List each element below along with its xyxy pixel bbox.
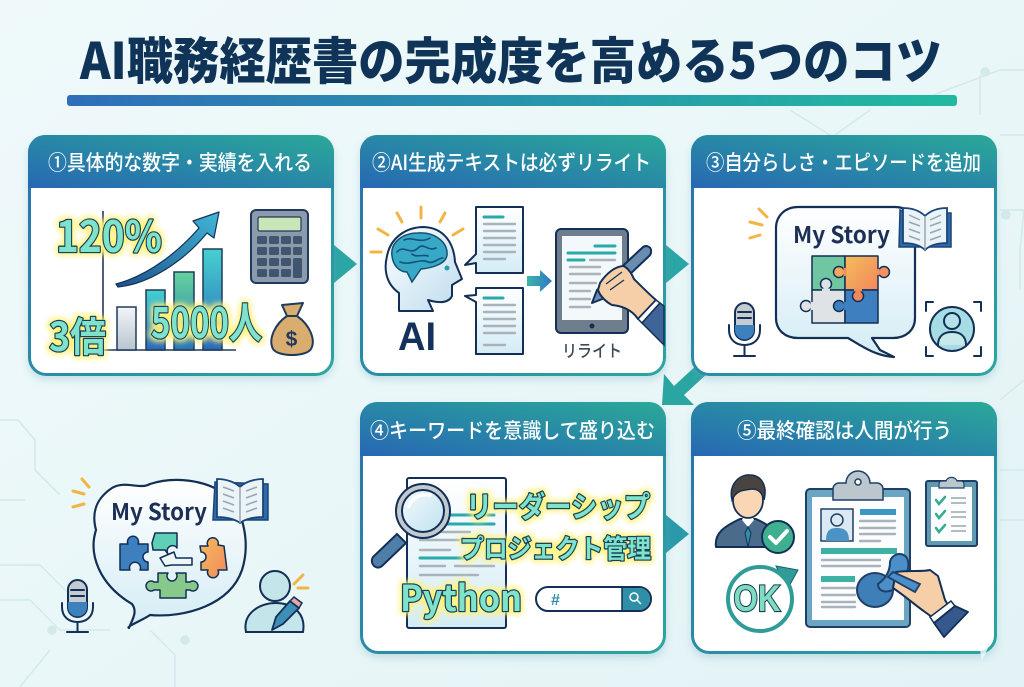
label リライト: リライト (562, 337, 622, 362)
card body 1 (30, 136, 332, 374)
icon: book free (213, 479, 268, 523)
stat 120%: 120% (56, 203, 162, 265)
icon: OK bubble: OK (734, 578, 781, 619)
panel: free illustration my story (62, 479, 308, 632)
card body 3 (692, 136, 996, 374)
generated text bubble bottom (465, 288, 523, 354)
icon: magnifying glass (372, 484, 450, 568)
story label: My Story (793, 216, 890, 250)
title: AI職務経歴書の完成度を高める5つのコツ (79, 22, 942, 94)
bar chart with arrow (103, 211, 236, 350)
label AI: AI (398, 315, 436, 359)
panel: step 3 my story (691, 135, 997, 374)
stat 5000人: 5000人 (151, 290, 262, 351)
header 3 (691, 135, 997, 188)
panel: step 2 rewrite (360, 135, 666, 374)
card body 4 (362, 404, 664, 652)
icon: speech bubble (776, 207, 915, 357)
icon: puzzle (800, 256, 890, 323)
panel: step 5 human check (691, 402, 997, 652)
title underline bar (67, 95, 957, 106)
icon: small checklist (926, 477, 977, 546)
header 4 (360, 402, 666, 456)
icon: microphone free (62, 580, 93, 632)
icon: money bag (271, 303, 313, 355)
arrow: step 2 to 3 (666, 245, 689, 283)
icon: stamp and hand (857, 554, 968, 637)
heading 4: ④キーワードを意識して盛り込む (370, 415, 655, 445)
search box: # (551, 592, 560, 609)
panel: step 1 numbers (28, 135, 334, 374)
icon: business person (716, 475, 780, 547)
icon: sparks (750, 209, 767, 238)
large speech bubble (94, 480, 246, 628)
search box (536, 587, 651, 611)
icon: clipboard resume (806, 471, 910, 627)
generated text bubble top (465, 207, 523, 273)
card body 5 (692, 404, 996, 652)
keyword Python: Python (400, 570, 522, 622)
icon: person with pencil (245, 571, 308, 632)
icon: AI head with brain (386, 227, 462, 311)
icon: OK bubble (728, 566, 798, 631)
icon: hand writing with pen (592, 246, 664, 345)
card body 2 (362, 136, 664, 374)
icon: microphone (729, 303, 760, 356)
sparkle (978, 640, 992, 660)
arrow: step 1 to 2 (334, 245, 357, 283)
keyword プロジェクト管理: プロジェクト管理 (460, 529, 651, 566)
header 1 (28, 135, 334, 188)
icon: idea rays (371, 207, 463, 252)
heading 5: ⑤最終確認は人間が行う (737, 415, 952, 445)
header 5 (691, 402, 997, 456)
keyword リーダーシップ: リーダーシップ (466, 484, 650, 526)
icon: scattered puzzle pieces (120, 533, 227, 598)
icon: money bag: $ (286, 328, 298, 351)
icon: profile frame (926, 302, 981, 356)
heading 1: ①具体的な数字・実績を入れる (48, 147, 312, 177)
icon: resume document (407, 478, 506, 628)
arrow: step 4 to 5 (666, 515, 689, 553)
heading 2: ②AI生成テキストは必ずリライト (372, 147, 651, 177)
icon: calculator (251, 210, 308, 283)
header 2 (360, 135, 666, 188)
icon: check badge (762, 521, 794, 553)
heading 3: ③自分らしさ・エピソードを追加 (706, 147, 981, 177)
arrow: step 3 to 4 diagonal (662, 362, 709, 405)
story label free: My Story (111, 493, 207, 527)
panel: step 4 keywords (360, 402, 666, 652)
icon: sparks free (73, 479, 89, 507)
stat 3倍: 3倍 (49, 305, 106, 363)
icon: book (899, 208, 951, 250)
icon: tablet (556, 229, 628, 333)
small arrow (527, 270, 552, 292)
